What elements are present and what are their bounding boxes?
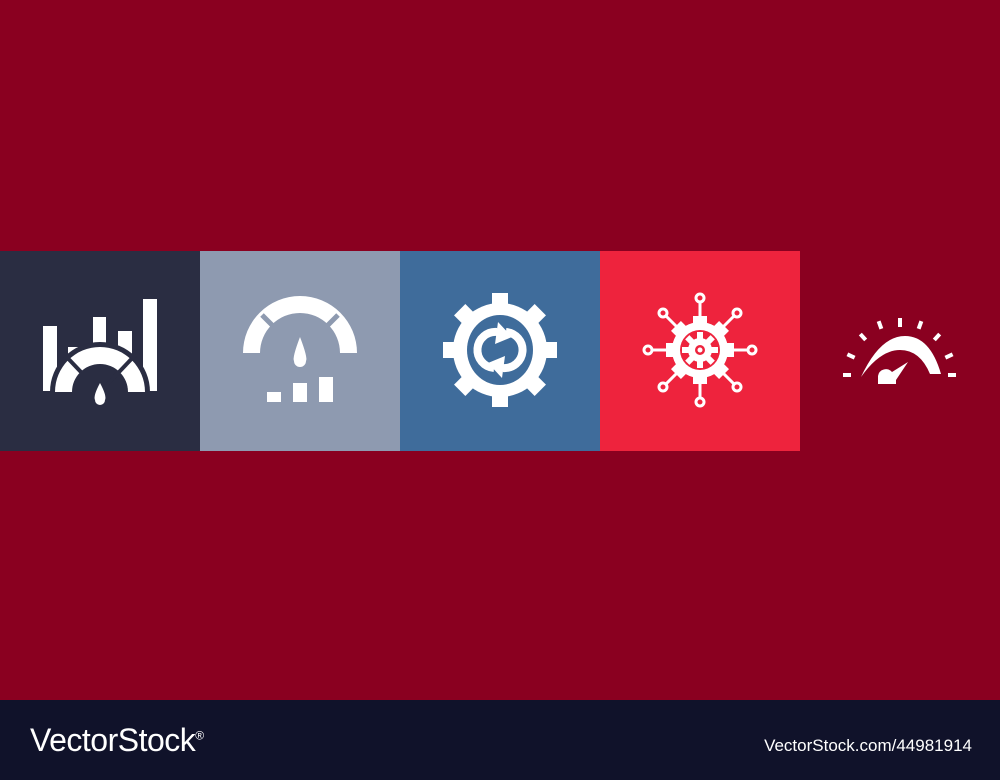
footer id text: VectorStock.com/44981914: [764, 736, 972, 755]
footer bar: [0, 700, 1000, 780]
panel: gear refresh: [400, 251, 600, 451]
icon: bars with gauge: [43, 299, 157, 405]
icon: gauge with bars: [243, 296, 357, 402]
icon: gear network: [644, 294, 756, 406]
panel: bar chart gauge: [0, 251, 200, 451]
footer logo text: VectorStock®: [30, 722, 204, 758]
panel: gear network: [600, 251, 800, 451]
icon: gear with refresh: [443, 293, 557, 407]
panel: gauge: [200, 251, 400, 451]
icon: speedometer: [843, 318, 956, 384]
